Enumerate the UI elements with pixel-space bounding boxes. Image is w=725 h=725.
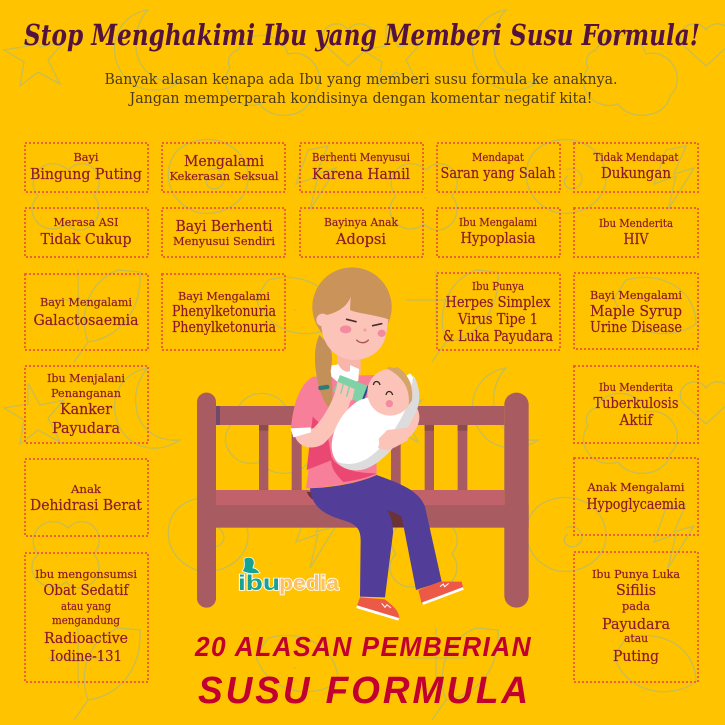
panel: Sifilis: atau — [624, 631, 648, 645]
cheeks — [340, 325, 351, 333]
panel: Maple Syrup: Maple Syrup — [590, 304, 682, 320]
swaddle shade — [337, 375, 419, 470]
panel: Herpes Simplex: Herpes Simplex — [446, 295, 550, 311]
swaddle — [332, 373, 419, 470]
collar — [328, 364, 359, 387]
subtitle — [104, 72, 618, 107]
panel: Herpes Simplex: & Luka Payudara — [443, 329, 553, 345]
panel: Sifilis: Ibu Punya Luka — [592, 567, 680, 581]
hair — [312, 267, 392, 347]
dress shading — [307, 417, 377, 482]
panel: Hypoglycaemia: Anak Mengalami — [587, 480, 685, 494]
panel: Bayi Berhenti: Menyusui Sendiri — [173, 234, 275, 248]
face — [321, 297, 388, 360]
panel: Kanker Payudara: Penanganan — [51, 386, 122, 400]
panel: Maple Syrup: Urine Disease — [590, 320, 682, 336]
panel: Dehidrasi Berat — [25, 459, 148, 536]
logo: ibupedia: ibu — [238, 572, 280, 595]
thigh shadow on seat — [307, 492, 407, 527]
panel: Tuberkulosis: Tuberkulosis — [594, 396, 678, 412]
smile — [356, 340, 369, 343]
baby head — [367, 369, 413, 416]
panel: Galactosaemia: Bayi Mengalami — [40, 295, 132, 309]
panel: Tidak Mendapat Dukungan: Dukungan — [601, 166, 671, 182]
neck — [337, 353, 361, 380]
panel: Saran yang Salah — [437, 143, 560, 192]
panel: Obat Sedatif — [25, 553, 148, 682]
panel: Tidak Cukup: Merasa ASI — [54, 215, 118, 229]
panel: Kekerasan Seksual: Kekerasan Seksual — [170, 169, 279, 183]
braid — [315, 335, 332, 411]
eyes — [347, 319, 382, 326]
hair tie — [318, 385, 330, 390]
near shoe — [357, 597, 399, 618]
panel: Bingung Puting: Bingung Puting — [30, 167, 142, 183]
panel: Phenylketonuria: Bayi Mengalami — [178, 289, 270, 303]
panel: Bingung Puting: Bayi — [74, 150, 99, 164]
subtitle: Jangan memperparah kondisinya dengan komentar negatif kita! — [128, 91, 592, 107]
panel: Saran yang Salah: Mendapat — [472, 150, 524, 164]
panel: Saran yang Salah: Saran yang Salah — [440, 166, 556, 182]
panel: Galactosaemia: Galactosaemia — [34, 313, 139, 329]
panel: Dehidrasi Berat: Dehidrasi Berat — [30, 498, 142, 514]
panel: Tuberkulosis: Aktif — [619, 413, 654, 429]
panel: Adopsi — [300, 208, 423, 257]
panel: Obat Sedatif: Ibu mengonsumsi — [35, 567, 137, 581]
panel: Hypoglycaemia: Hypoglycaemia — [586, 497, 686, 513]
panel: Hypoplasia — [437, 208, 560, 257]
heading: 20 alasan pemberian: 20 ALASAN PEMBERIAN — [194, 631, 532, 662]
baby eyes and cheek — [373, 381, 393, 395]
panel: Hypoplasia: Ibu Mengalami — [459, 215, 537, 229]
panel: Obat Sedatif: Obat Sedatif — [44, 583, 130, 599]
baby-holding arm behind — [377, 403, 419, 450]
panel: Karena Hamil: Berhenti Menyusui — [312, 150, 410, 164]
bottle — [333, 375, 368, 403]
logo: ibupedia — [238, 557, 339, 595]
panel: Tuberkulosis: Ibu Menderita — [599, 380, 673, 394]
body — [291, 375, 377, 488]
panel: Hypoglycaemia — [574, 458, 698, 535]
panel: Sifilis: Payudara — [602, 617, 670, 633]
panel: Kanker Payudara — [25, 366, 148, 443]
feeding arm — [295, 383, 351, 447]
far shoe — [418, 582, 463, 603]
panel: Obat Sedatif: Iodine-131 — [50, 649, 122, 665]
panel: Bayi Berhenti — [162, 208, 285, 257]
fingers — [337, 382, 355, 401]
panel: HIV — [574, 208, 698, 257]
panel: Bingung Puting — [25, 143, 148, 192]
panel: Kanker Payudara: Ibu Menjalani — [47, 371, 125, 385]
panel: Kanker Payudara: Kanker — [60, 402, 112, 418]
panel: Phenylketonuria — [162, 274, 285, 350]
panel: Kanker Payudara: Payudara — [52, 421, 120, 437]
trousers — [308, 475, 442, 597]
panel: Sifilis: Puting — [613, 649, 659, 665]
panel: Karena Hamil — [300, 143, 423, 192]
panel: HIV: HIV — [624, 232, 649, 248]
subtitle: Banyak alasan kenapa ada Ibu yang memberi susu formula ke anaknya. — [104, 72, 618, 88]
panel: Bayi Berhenti: Bayi Berhenti — [176, 219, 273, 235]
cuff — [291, 427, 311, 437]
panel: Obat Sedatif: atau yang — [61, 599, 112, 613]
panel: HIV: Ibu Menderita — [599, 216, 673, 230]
panel: Sifilis — [574, 552, 698, 682]
logo: ibupedia: pedia — [279, 572, 339, 595]
illustration: mother feeding baby — [291, 267, 463, 619]
panel: Hypoplasia: Hypoplasia — [460, 231, 536, 247]
panel: Obat Sedatif: mengandung — [52, 613, 121, 627]
panel: Herpes Simplex: Virus Tipe 1 — [457, 312, 538, 328]
panel: Herpes Simplex — [437, 273, 560, 350]
panel: Galactosaemia — [25, 274, 148, 350]
heading: susu formula: SUSU FORMULA — [198, 670, 531, 712]
panel: Adopsi: Adopsi — [335, 232, 386, 248]
panel: Tidak Cukup: Tidak Cukup — [40, 232, 132, 248]
panel: Obat Sedatif: Radioactive — [44, 631, 128, 647]
panel: Adopsi: Bayinya Anak — [324, 215, 399, 229]
panel: Phenylketonuria: Phenylketonuria — [172, 304, 276, 320]
panel: Karena Hamil: Karena Hamil — [312, 167, 410, 183]
illustration: bench — [197, 393, 529, 608]
panel: Tidak Cukup — [25, 208, 148, 257]
panel: Tuberkulosis — [574, 366, 698, 443]
panel: Maple Syrup — [574, 273, 698, 349]
panel: Kekerasan Seksual: Mengalami — [184, 154, 264, 170]
panel: Maple Syrup: Bayi Mengalami — [590, 288, 682, 302]
hand on swaddle — [378, 427, 411, 451]
panel: Dehidrasi Berat: Anak — [70, 482, 102, 496]
panel: Tidak Mendapat Dukungan: Tidak Mendapat — [594, 150, 679, 164]
panel: Tidak Mendapat Dukungan — [574, 143, 698, 192]
panel: Phenylketonuria: Phenylketonuria — [172, 320, 276, 336]
panel: Sifilis: Sifilis — [616, 583, 656, 599]
panel: Kekerasan Seksual — [162, 143, 285, 192]
panel: Sifilis: pada — [622, 599, 650, 613]
panel: Herpes Simplex: Ibu Punya — [472, 279, 524, 293]
